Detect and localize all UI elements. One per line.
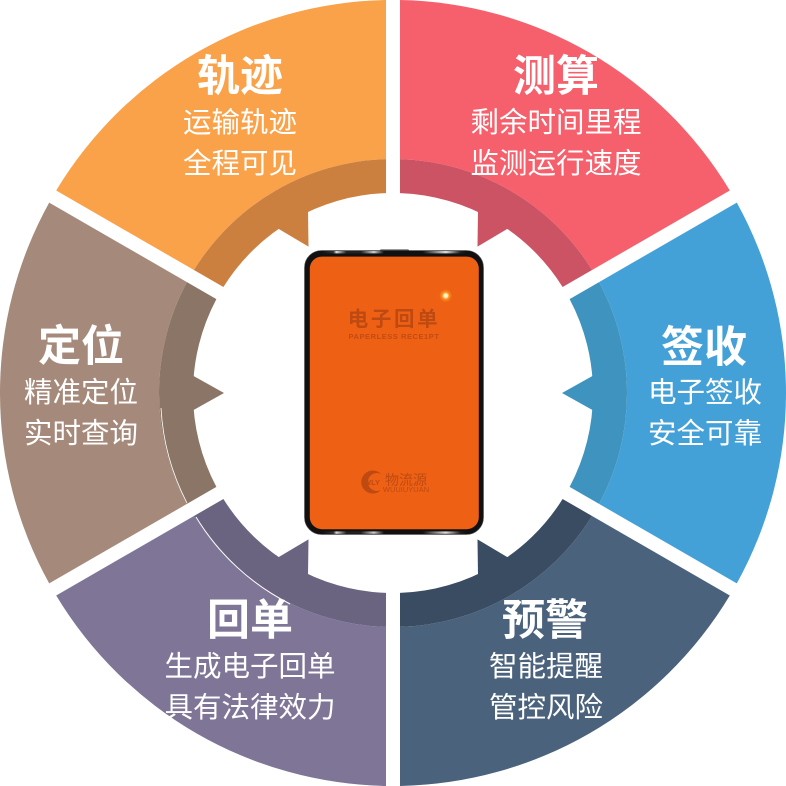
panel: 预警 segment (400, 499, 730, 786)
device label: 电子回单 (348, 308, 440, 331)
device logo: WUUIUYUAN (383, 485, 429, 494)
device top button (380, 250, 409, 252)
panel: 回单 segment: 生成电子回单 (164, 651, 336, 683)
panel: 回单 segment: 回单 (207, 597, 293, 645)
panel: 轨迹 segment: 全程可见 (183, 148, 297, 180)
device logo: 物流源 (385, 472, 427, 488)
device sublabel: PAPERLESS RECE1PT (349, 332, 439, 341)
panel: 测算 segment: 测算 (513, 53, 599, 101)
panel: 签收 segment: 签收 (661, 324, 747, 372)
panel: 签收 segment: 安全可靠 (648, 418, 762, 450)
panel: 定位 segment: 实时查询 (24, 418, 138, 450)
panel: 预警 segment: 智能提醒 (489, 651, 603, 683)
device logo: WLY (364, 478, 380, 487)
device logo (361, 470, 429, 494)
panel: 定位 segment (0, 203, 224, 583)
device body (304, 250, 484, 534)
device: electronic receipt tracker (304, 250, 484, 534)
panel: 预警 segment: 预警 (502, 597, 588, 645)
panel: 签收 segment (562, 203, 786, 583)
panel: 回单 segment: 具有法律效力 (164, 692, 336, 724)
panel: 轨迹 segment: 运输轨迹 (183, 107, 297, 139)
panel: 预警 segment: 管控风险 (489, 692, 603, 724)
panel: 测算 segment (400, 0, 730, 287)
panel: 测算 segment: 监测运行速度 (470, 148, 642, 180)
panel: 轨迹 segment (56, 0, 386, 287)
panel: 签收 segment: 电子签收 (648, 377, 762, 409)
panel: 定位 segment: 精准定位 (24, 377, 138, 409)
panel: 轨迹 segment: 轨迹 (197, 53, 283, 101)
panel: 回单 segment (56, 499, 386, 786)
panel: 测算 segment: 剩余时间里程 (470, 107, 642, 139)
indicator light (439, 289, 452, 302)
panel: 定位 segment: 定位 (38, 323, 124, 371)
